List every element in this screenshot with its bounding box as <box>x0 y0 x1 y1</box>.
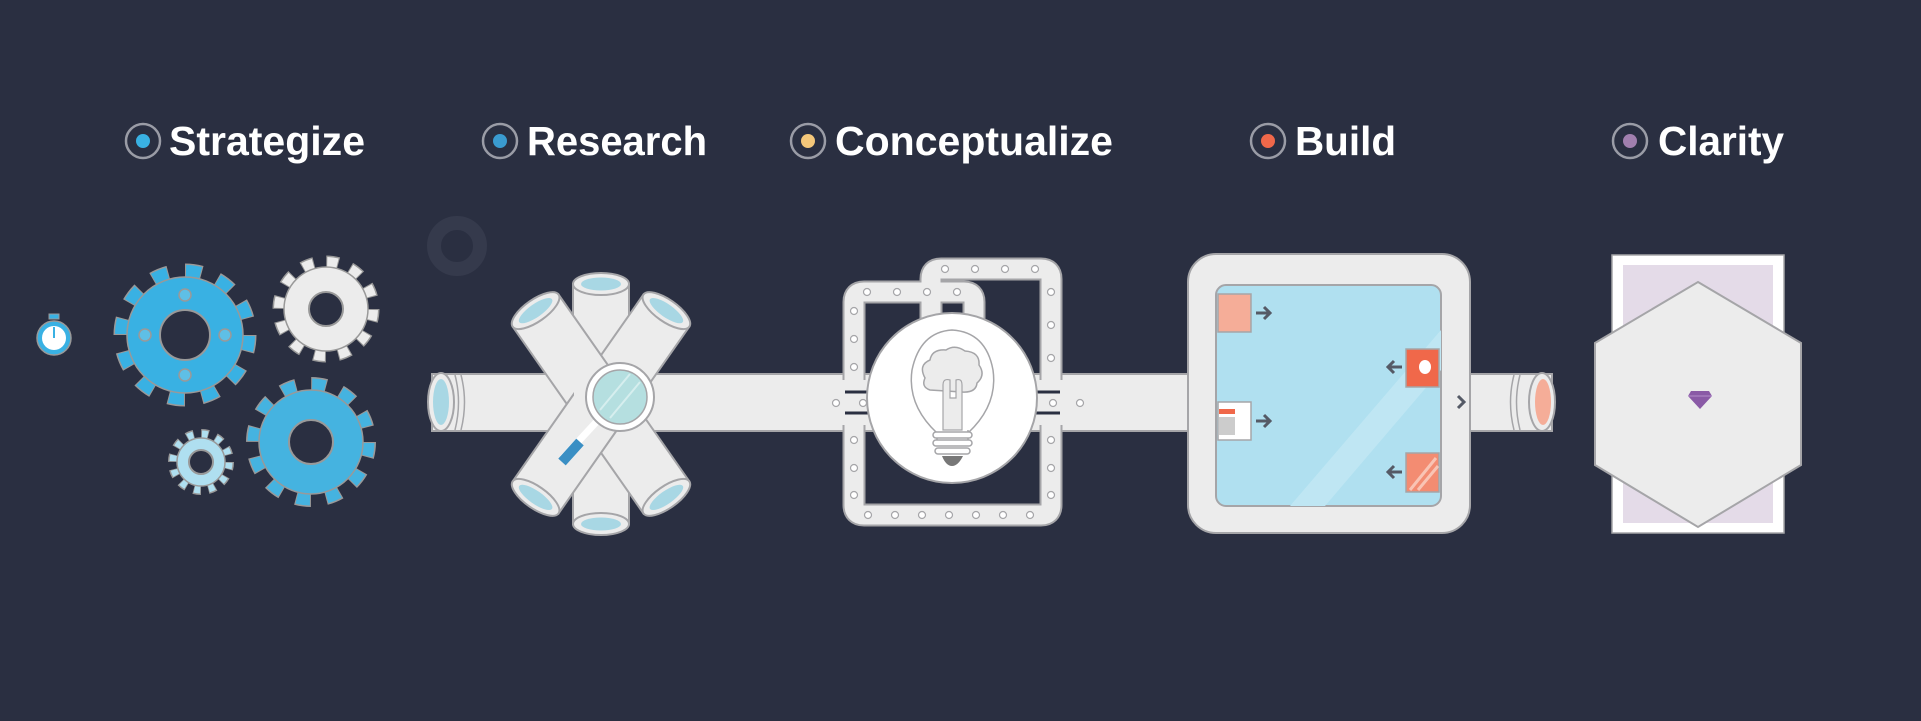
icon: stopwatch <box>37 314 71 355</box>
panel: build box <box>1188 254 1470 533</box>
heading: Research: Research <box>527 118 707 164</box>
heading: Strategize: Strategize <box>169 118 365 164</box>
icon: left pipe end cap <box>428 373 464 431</box>
icon: research star pipes <box>506 273 696 535</box>
heading: Build: Build <box>1295 118 1396 164</box>
icon: big blue gear <box>121 271 249 399</box>
hexagon <box>1595 282 1801 527</box>
arrow: chevron <box>1458 396 1464 408</box>
icon: small light-blue gear <box>173 434 229 490</box>
heading: Conceptualize: Conceptualize <box>835 118 1113 164</box>
icon: gem <box>1688 391 1712 409</box>
pipe: main horizontal pipe <box>432 374 1552 431</box>
heading: Build <box>1251 118 1396 164</box>
icon: lightbulb with brain <box>867 313 1037 483</box>
icon: medium blue gear <box>253 384 369 500</box>
icon: faint ring <box>434 223 480 269</box>
pipe loops around lightbulb <box>832 266 1084 518</box>
build block: striped salmon <box>1388 453 1439 492</box>
build block: white with red band <box>1218 402 1270 440</box>
build block: orange with circle <box>1388 349 1439 387</box>
build block: salmon top-left <box>1218 294 1270 332</box>
heading: Clarity: Clarity <box>1658 118 1784 164</box>
panel: clarity frame <box>1595 255 1801 533</box>
icon: right pipe end cap <box>1510 373 1555 431</box>
icon: white gear <box>279 262 373 356</box>
icon: magnifying glass <box>562 363 654 462</box>
